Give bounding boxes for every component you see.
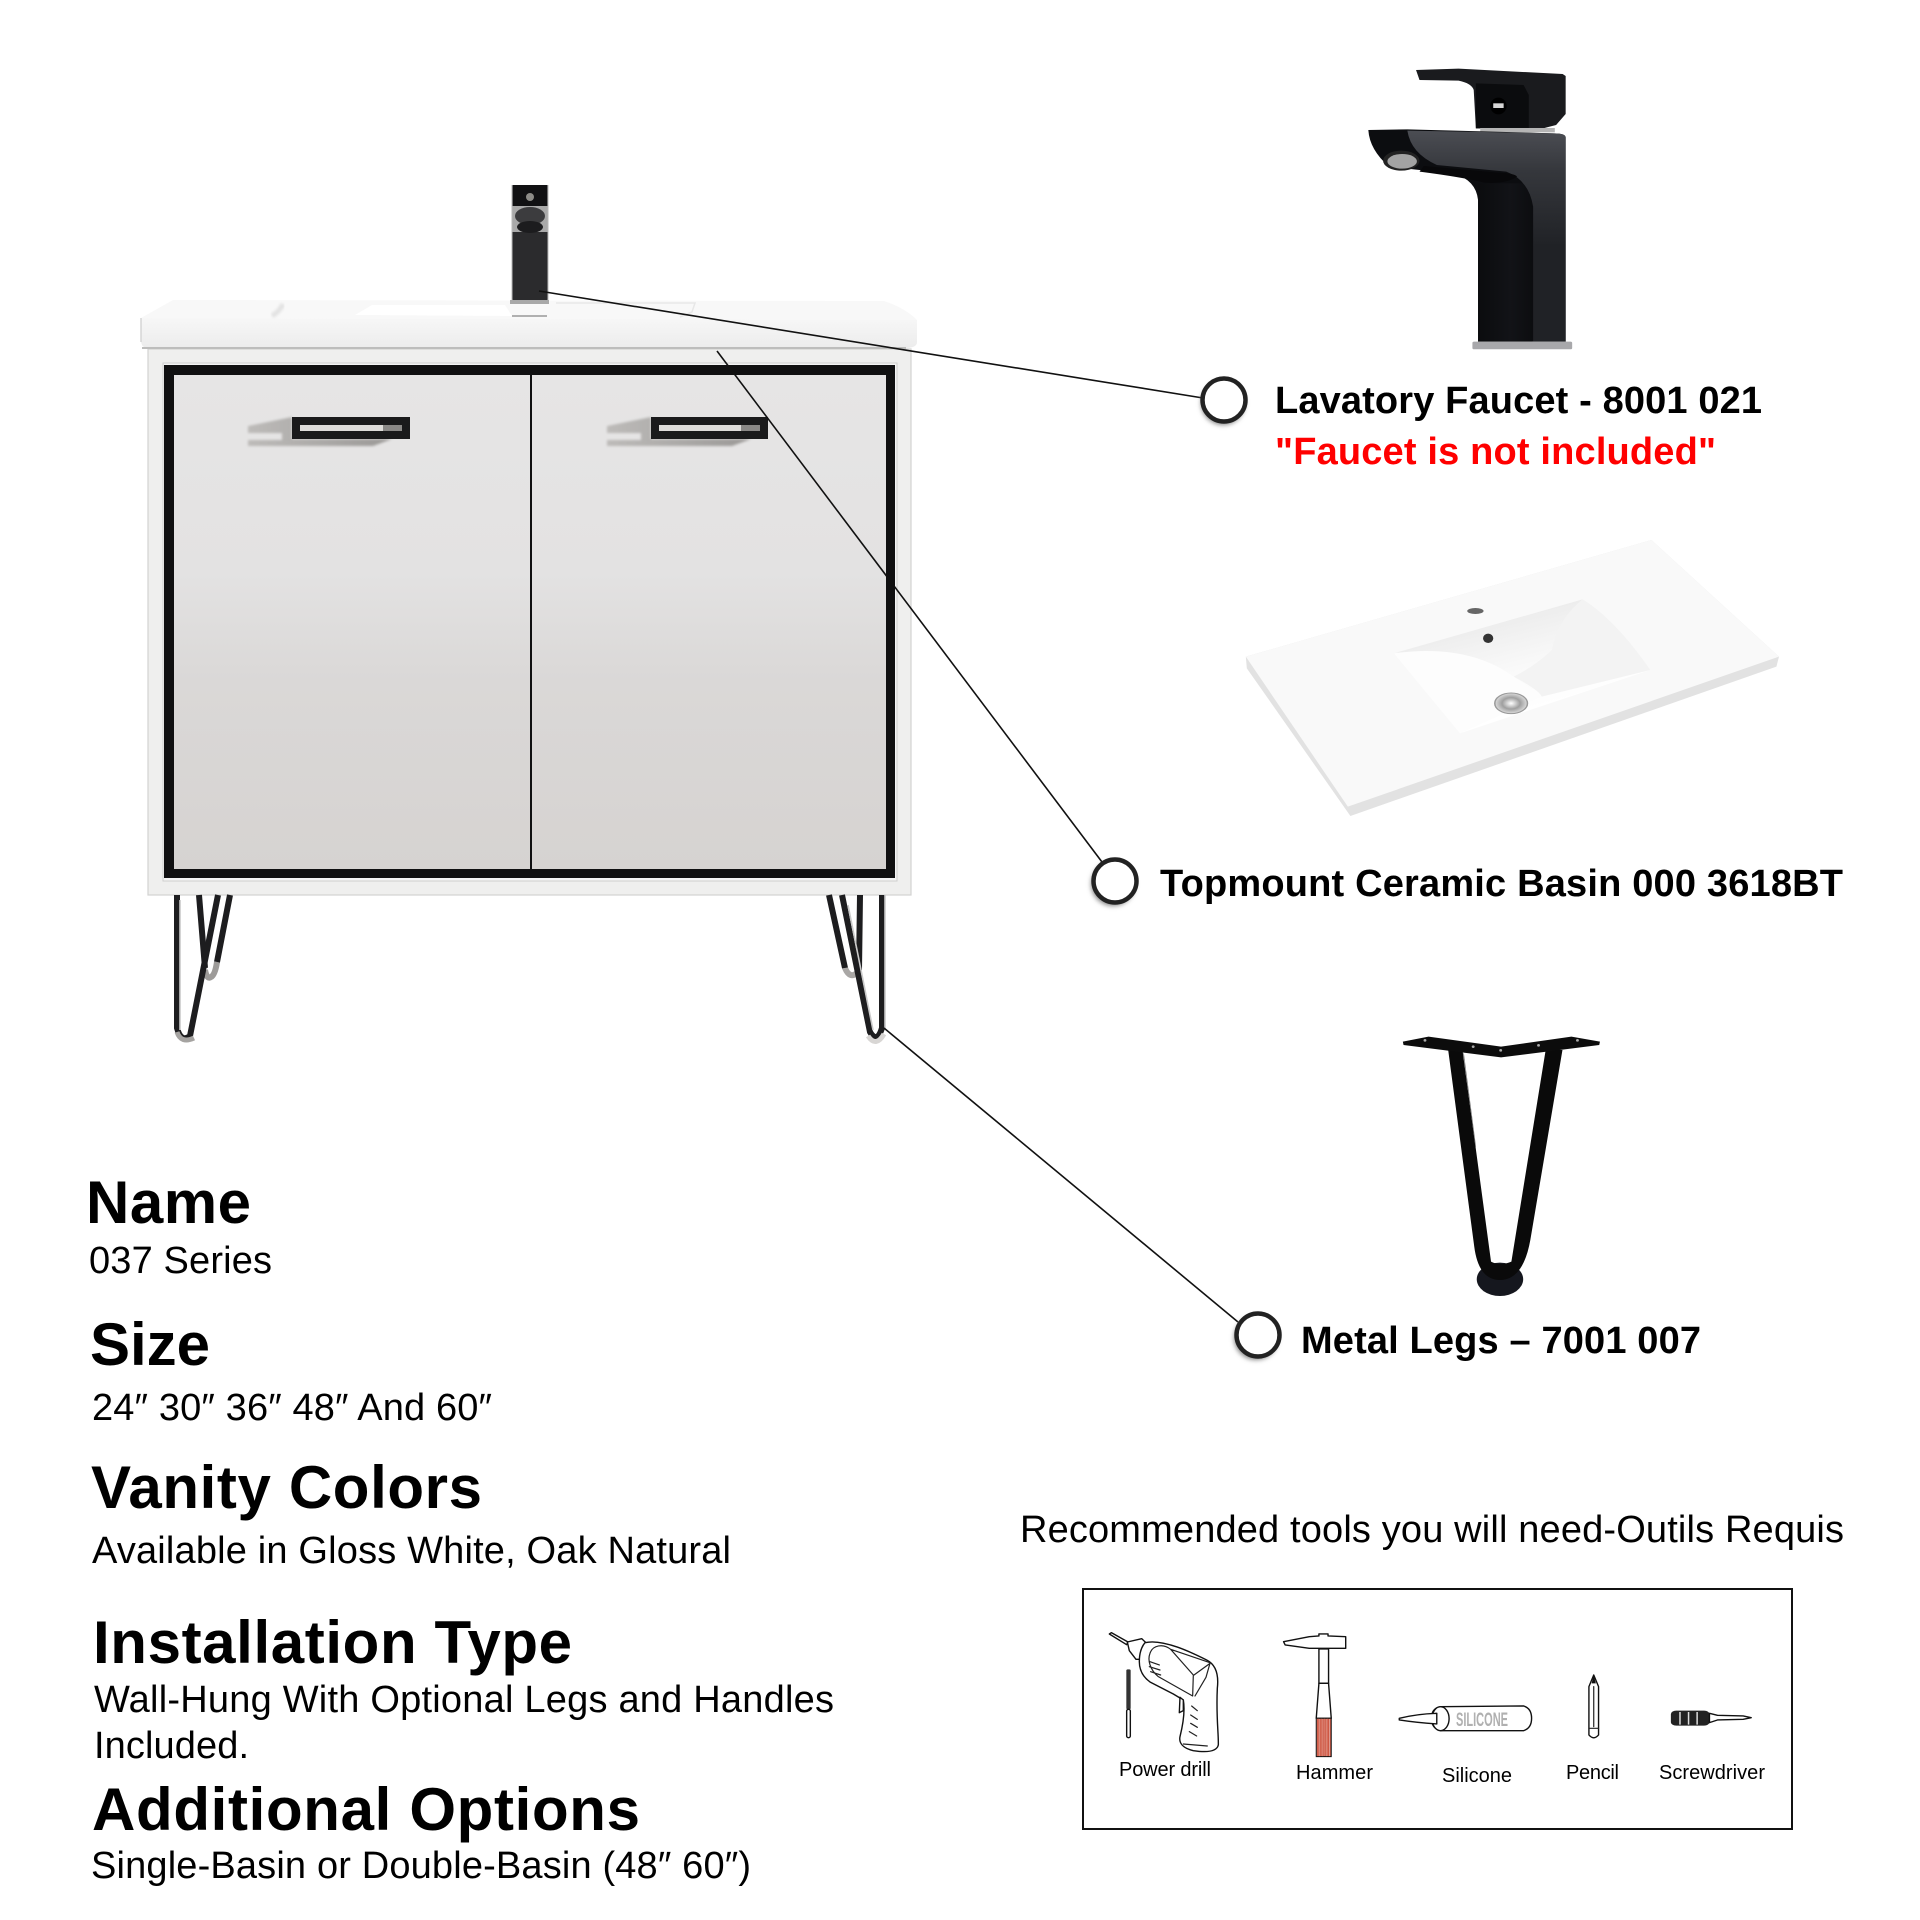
spec block: additional options: Single-Basin or Double-Basin (48″ 60″) xyxy=(91,1845,751,1887)
product image: metal leg xyxy=(1403,1037,1600,1296)
spec block: vanity colors: Available in Gloss White, Oak Natural xyxy=(92,1530,731,1572)
label: faucet name: Lavatory Faucet - 8001 021 xyxy=(1275,380,1762,422)
left legs xyxy=(177,895,230,1040)
leader line: basin xyxy=(717,351,1102,862)
right legs xyxy=(829,895,885,1042)
vanity cabinet xyxy=(141,185,917,1042)
spec block: name xyxy=(86,1169,272,1282)
product image: faucet xyxy=(1368,69,1572,349)
spec block: name: 037 Series xyxy=(89,1240,272,1282)
countertop xyxy=(141,300,917,348)
spec block: vanity colors xyxy=(91,1454,731,1572)
spec block: size xyxy=(90,1311,492,1429)
tool: screwdriver xyxy=(1659,1711,1765,1784)
spec block: size: Size xyxy=(90,1311,210,1378)
right door handle xyxy=(607,417,768,446)
callout marker: legs xyxy=(1234,1314,1280,1360)
spec block: installation type: Installation Type xyxy=(93,1609,572,1676)
tool: silicone tube xyxy=(1399,1706,1532,1787)
spec block: additional options xyxy=(91,1776,751,1887)
tools panel xyxy=(1083,1589,1792,1829)
left door xyxy=(174,375,530,869)
tool: pencil xyxy=(1566,1675,1619,1784)
carcass inner rail xyxy=(163,363,897,881)
spec block: installation type: Wall-Hung With Optional Legs and Handles xyxy=(94,1679,834,1721)
spec block: installation type xyxy=(93,1609,834,1767)
tool: hammer: Hammer xyxy=(1296,1762,1373,1784)
tools heading: Recommended tools you will need-Outils Requis xyxy=(1020,1509,1844,1551)
callout marker: basin xyxy=(1091,860,1136,906)
spec block: name: Name xyxy=(86,1169,251,1236)
carcass xyxy=(148,349,911,895)
tool: screwdriver: Screwdriver xyxy=(1659,1762,1765,1784)
tool: power drill xyxy=(1109,1633,1218,1781)
tool: power drill: Power drill xyxy=(1119,1759,1211,1781)
spec block: vanity colors: Vanity Colors xyxy=(91,1454,482,1521)
leader line: faucet xyxy=(539,291,1203,398)
right door xyxy=(532,375,886,869)
label: legs name: Metal Legs – 7001 007 xyxy=(1301,1320,1701,1362)
spec block: installation type: Included. xyxy=(94,1725,249,1767)
tool: silicone tube: Silicone xyxy=(1442,1765,1512,1787)
leader line: legs xyxy=(884,1028,1238,1322)
callout marker: faucet xyxy=(1201,378,1246,425)
vanity faucet xyxy=(512,185,548,300)
product image: basin xyxy=(1246,540,1779,816)
spec block: additional options: Additional Options xyxy=(92,1776,640,1843)
tool: pencil: Pencil xyxy=(1566,1762,1619,1784)
spec block: size: 24″ 30″ 36″ 48″ And 60″ xyxy=(92,1387,492,1429)
tool: hammer xyxy=(1284,1634,1373,1784)
left door handle xyxy=(248,417,410,446)
black inner frame xyxy=(164,365,895,878)
label: basin name: Topmount Ceramic Basin 000 3618BT xyxy=(1160,863,1843,905)
tool: silicone tube: SILICONE xyxy=(1456,1710,1508,1731)
label: faucet not included: "Faucet is not included" xyxy=(1275,431,1716,473)
